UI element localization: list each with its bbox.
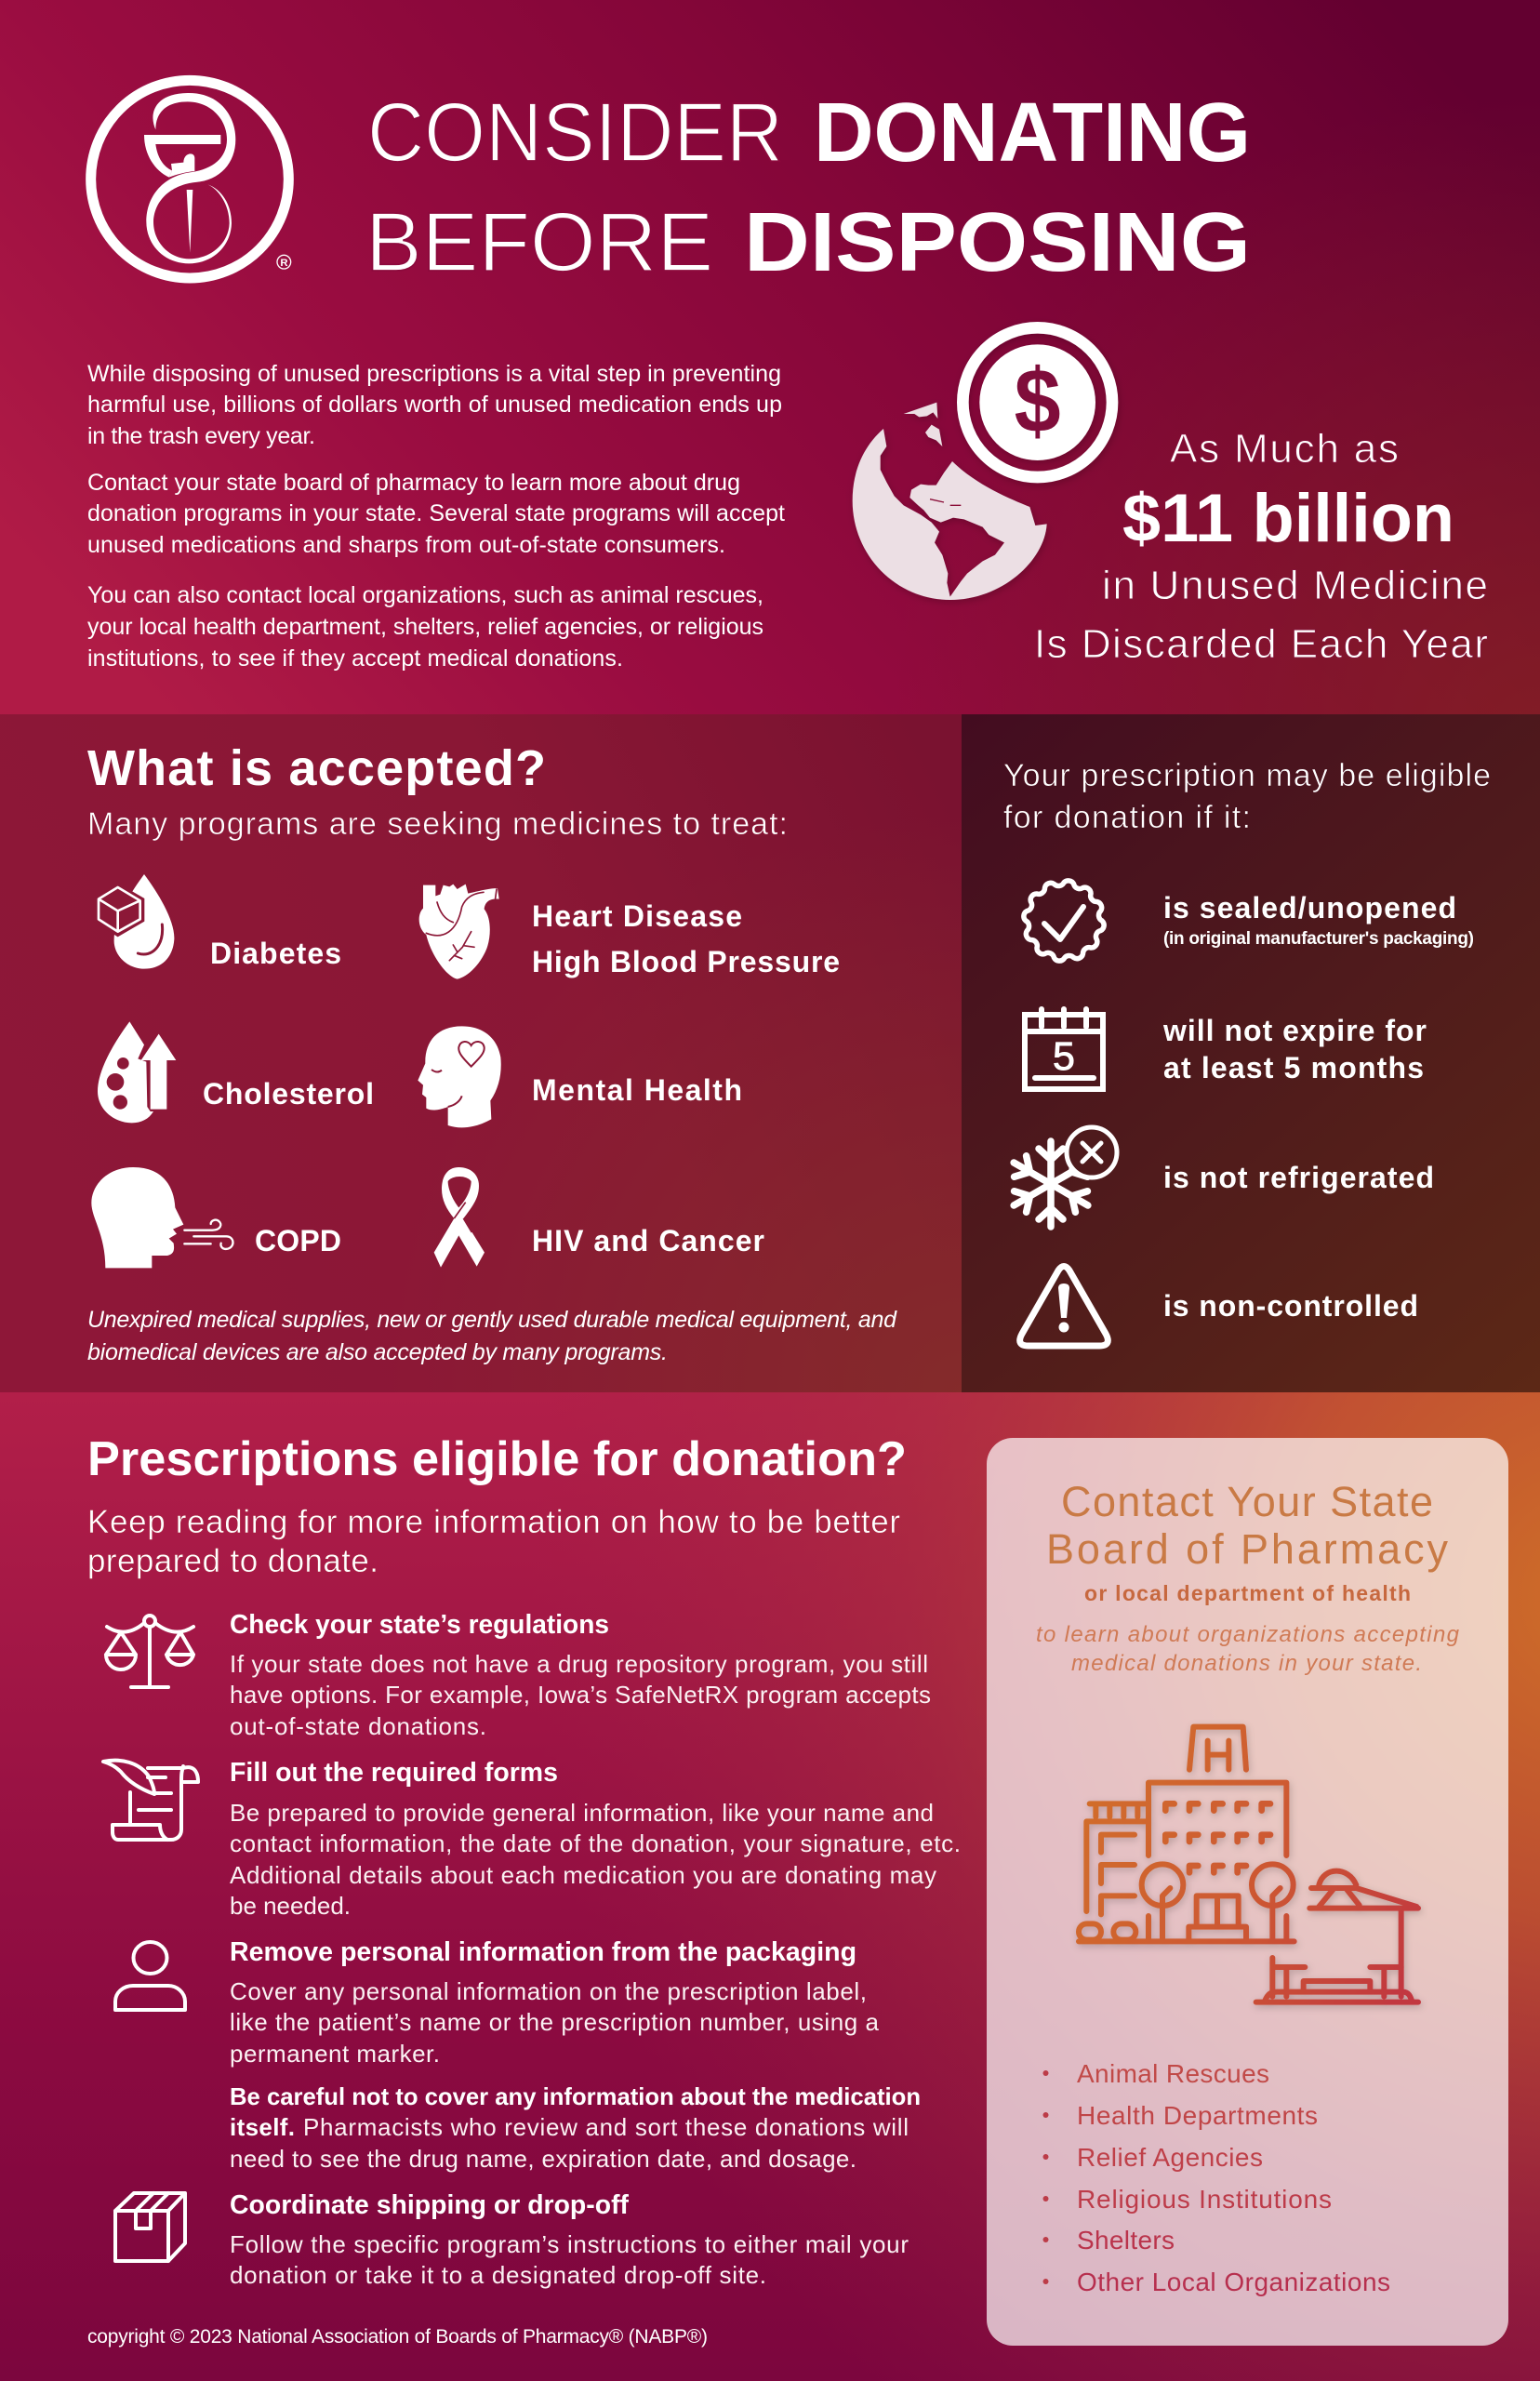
callout: 11 billion statistic: As Much as	[1170, 426, 1399, 472]
icon: warning triangle	[1020, 1267, 1108, 1346]
text block: introduction: institutions, to see if they accept medical donations.	[87, 645, 623, 672]
text block: medical supplies note: Unexpired medical supplies, new or gently used durable medical equipment, and	[87, 1307, 897, 1333]
callout: 11 billion statistic: Is Discarded Each Year	[1034, 621, 1488, 667]
text block: step 2 required forms	[230, 1758, 961, 1920]
title	[365, 86, 1251, 289]
list: local organizations: Religious Institutions	[1077, 2185, 1332, 2214]
list: local organizations: Health Departments	[1077, 2101, 1318, 2130]
text block: introduction: Contact your state board of pharmacy to learn more about drug	[87, 470, 740, 496]
labels: conditions: Heart Disease	[532, 899, 742, 933]
heading: contact your state board: Board of Pharmacy	[1046, 1525, 1449, 1573]
text block: step 1 check regulations: Check your state’s regulations	[230, 1610, 609, 1640]
icon: scales	[106, 1616, 193, 1687]
text block: introduction: unused medications and sharps from out-of-state consumers.	[87, 532, 725, 558]
callout: 11 billion statistic	[1034, 426, 1488, 667]
labels: conditions: HIV and Cancer	[532, 1224, 764, 1257]
text block: step 2 required forms: contact information, the date of the donation, your signature, etc.	[230, 1829, 961, 1857]
panel: contact card	[987, 1438, 1508, 2346]
text block: learn about organizations: medical donations in your state.	[1071, 1651, 1422, 1676]
icon: cholesterol drop and arrow	[98, 1021, 176, 1123]
icon: NABP logo	[91, 80, 291, 278]
text block: step 1 check regulations: If your state does not have a drug repository program, you still	[230, 1650, 928, 1678]
callout: 11 billion statistic: in Unused Medicine	[1102, 563, 1488, 608]
panel: prescriptions eligible background	[0, 1392, 1540, 2381]
text block: introduction	[87, 361, 785, 672]
panel: eligibility background	[962, 714, 1540, 1392]
icon grid: conditions	[91, 874, 501, 1268]
heading: what is accepted: What is accepted?	[87, 740, 546, 796]
heading: eligibility	[1003, 758, 1491, 835]
text block: eligibility criteria: is not refrigerated	[1163, 1161, 1434, 1194]
icon: awareness ribbon	[434, 1167, 485, 1268]
text block: eligibility criteria	[1162, 891, 1474, 1323]
text block: learn about organizations	[1036, 1622, 1460, 1676]
icon: sealed badge	[1024, 881, 1104, 961]
text block: introduction: You can also contact local organizations, such as animal rescues,	[87, 582, 763, 608]
text block: step 4 shipping: donation or take it to a designated drop-off site.	[230, 2261, 766, 2289]
heading: eligibility: for donation if it:	[1003, 800, 1251, 835]
text block: step 1 check regulations: have options. For example, Iowa’s SafeNetRX program accepts	[230, 1681, 931, 1709]
heading: contact your state board: Contact Your State	[1061, 1478, 1433, 1525]
text block: keep reading: Keep reading for more information on how to be better	[87, 1504, 900, 1540]
icon: diabetes drop and cube	[94, 874, 174, 969]
icon: hospital and shelter	[1079, 1727, 1418, 2002]
text block: step 2 required forms: Additional details about each medication you are donating may	[230, 1861, 936, 1889]
icon: person	[115, 1942, 185, 2010]
title: DONATING	[814, 86, 1251, 180]
title: CONSIDER	[367, 86, 783, 180]
icon: package box	[115, 2193, 185, 2261]
text block: eligibility criteria: at least 5 months	[1163, 1051, 1424, 1084]
text block: eligibility criteria: will not expire for	[1162, 1014, 1427, 1047]
text block: step 2 required forms: Be prepared to provide general information, like your name and	[230, 1799, 934, 1827]
heading: contact your state board	[1046, 1478, 1449, 1573]
icon: dollar coin	[962, 327, 1112, 477]
labels: conditions: Mental Health	[532, 1073, 742, 1107]
text block: keep reading: prepared to donate.	[87, 1543, 378, 1579]
title: BEFORE	[365, 196, 713, 289]
labels: conditions: Diabetes	[210, 937, 341, 970]
icon: snowflake not refrigerated	[1008, 1127, 1117, 1227]
icon: COPD head and wind	[91, 1167, 232, 1268]
text block: step 3 remove personal information	[230, 1937, 921, 2173]
text block: step 3 remove personal information: Remove personal information from the packaging	[230, 1937, 856, 1967]
list: local organizations: Other Local Organizations	[1077, 2268, 1390, 2296]
text block: step 4 shipping	[230, 2190, 909, 2289]
list: local organizations	[1043, 2059, 1390, 2296]
text block: eligibility criteria: is non-controlled	[1163, 1289, 1418, 1323]
text block: step 2 required forms: be needed.	[230, 1892, 351, 1920]
text block: keep reading	[87, 1504, 900, 1579]
icon: dollar coin: $	[1015, 350, 1061, 451]
text block: eligibility criteria: (in original manufacturer's packaging)	[1163, 929, 1474, 949]
icon: calendar: 5	[1053, 1034, 1075, 1079]
list: local organizations: Animal Rescues	[1077, 2059, 1269, 2088]
icon: NABP logo: R	[280, 258, 288, 269]
heading: prescriptions eligible: Prescriptions eligible for donation?	[87, 1432, 907, 1486]
text block: introduction: donation programs in your state. Several state programs will accept	[87, 500, 785, 526]
text block: step 3 remove personal information: permanent marker.	[230, 2040, 440, 2068]
panel: header background	[0, 0, 1540, 715]
text block: step 3 remove personal information: itself.	[230, 2113, 295, 2141]
icon: calendar	[1025, 1009, 1103, 1089]
icon: globe with dollar coin	[853, 327, 1112, 600]
text block: introduction: your local health department, shelters, relief agencies, or religious	[87, 614, 763, 640]
text block: medical supplies note: biomedical devices are also accepted by many programs.	[87, 1339, 668, 1365]
copyright: copyright © 2023 National Association of Boards of Pharmacy® (NABP®)	[87, 2326, 708, 2348]
labels: conditions: High Blood Pressure	[532, 945, 840, 978]
text block: step 4 shipping: Coordinate shipping or drop-off	[230, 2190, 629, 2220]
text block: step 3 remove personal information: Pharmacists who review and sort these donations will	[303, 2113, 909, 2141]
icon: scroll and quill	[103, 1761, 198, 1840]
labels: conditions: Cholesterol	[203, 1077, 374, 1111]
text block: step 3 remove personal information: Cover any personal information on the prescription label,	[230, 1977, 867, 2005]
text block: introduction: While disposing of unused prescriptions is a vital step in preventing	[87, 361, 781, 387]
text block: learn about organizations: to learn about organizations accepting	[1036, 1622, 1460, 1647]
panel: what is accepted background	[0, 714, 962, 1392]
text block: step 1 check regulations: out-of-state donations.	[230, 1712, 486, 1740]
list: local organizations: Shelters	[1077, 2226, 1175, 2255]
text block: introduction: harmful use, billions of dollars worth of unused medication ends up	[87, 392, 782, 418]
icon: mental health head	[418, 1026, 501, 1127]
heading: eligibility: Your prescription may be eligible	[1003, 758, 1491, 793]
text block: step 2 required forms: Fill out the required forms	[230, 1758, 558, 1788]
text block: step 1 check regulations	[230, 1610, 931, 1740]
text block: step 3 remove personal information: need to see the drug name, expiration date, and dosage.	[230, 2145, 856, 2173]
text block: introduction: in the trash every year.	[87, 423, 315, 449]
text block: medical supplies note	[87, 1307, 897, 1365]
labels: conditions	[203, 899, 840, 1257]
text block: step 3 remove personal information: like the patient’s name or the prescription number, using a	[230, 2008, 880, 2036]
text block: local department: or local department of health	[1084, 1581, 1411, 1605]
text block: step 4 shipping: Follow the specific program’s instructions to either mail your	[230, 2230, 909, 2258]
icon: anatomical heart	[419, 885, 499, 979]
icon: globe	[853, 403, 1047, 600]
labels: conditions: COPD	[255, 1224, 341, 1257]
text block: step 3 remove personal information: Be careful not to cover any information about the medication	[230, 2082, 921, 2110]
list: local organizations: Relief Agencies	[1077, 2143, 1263, 2172]
callout: 11 billion statistic: $11 billion	[1122, 481, 1454, 556]
text block: eligibility criteria: is sealed/unopened	[1163, 891, 1456, 924]
title: DISPOSING	[744, 196, 1251, 289]
text block: subheading treat: Many programs are seeking medicines to treat:	[87, 806, 788, 842]
